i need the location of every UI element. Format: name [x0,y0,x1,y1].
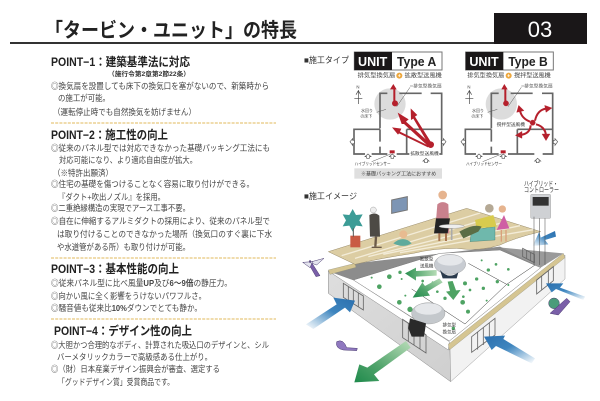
page number badge: 03 [528,17,552,42]
wall vents [343,248,553,353]
subtitle A [358,72,442,80]
subtitle B [467,72,551,80]
floor plan B [461,82,558,168]
controller [531,194,551,265]
panel: type A [350,52,446,179]
body text: point 1: の施工が可能。 [58,93,110,103]
subtitle A: + [398,74,401,80]
heading: installation image: ■施工イメージ [304,191,357,201]
controller label: ハイブリッド・ [524,179,558,188]
floor plan A: 排気型換気扇 [413,82,442,89]
body text: point 2: ◎住宅の基礎を傷つけることなく容易に取り付けができる。 [51,179,254,189]
body text: point 2: は取り付けることのできなかった場所（換気口のすぐ裏に下水 [57,229,272,239]
heading: installation type: ■施工タイプ [304,55,349,65]
fan: diffuser: 送風機 [420,262,434,269]
floor plan A: の床下 [360,113,372,118]
fan: exhaust [408,303,456,337]
floor plan A: 拡散型送風機 [410,150,439,157]
compass A: N [356,84,359,89]
body text: point 4 [51,340,269,387]
body text: point 2: ◎自在に伸縮するアルミダクトの採用により、従来のパネル型で [51,216,270,226]
controller label: コントローラー [524,186,559,194]
body text: point 4: 「グッドデザイン賞」受賞商品です。 [58,377,174,387]
body text: point 2: ◎従来のパネル型では対応できなかった基礎パッキング工法にも [51,143,270,153]
floor plan B: の床下 [471,113,483,118]
compass B: N [467,84,470,89]
subtitle B: + [507,74,510,80]
subtitle B: 排気型換気扇 [467,72,504,80]
subtitle A: 排気型換気扇 [358,72,395,80]
unit label A [354,52,442,70]
fan: diffuser [420,254,466,278]
arrows A [390,84,434,148]
fan: exhaust: 排気型 [443,322,456,329]
building walls [328,247,565,382]
unit label B: Type B [508,54,548,69]
insects [303,258,570,351]
note: ※基礎パッキング工法におすすめ [361,169,436,177]
floor plan B: 撹拌型送風機 [497,121,526,128]
body text: point 4: バーメタリックカラーで高級感ある仕上がり。 [57,352,212,362]
title: 「タービン・ユニット」の特長 [45,19,297,42]
page number badge [494,13,587,44]
floor plan B: 水回り [472,107,484,113]
body text: point 3 [51,278,232,313]
body text: point 2: や水道管がある所）も取り付けが可能。 [57,242,190,252]
floor plan B: ハイブリッドセンサー [466,161,502,168]
body text: point 4: ◎（財）日本産業デザイン振興会が審査、選定する [51,364,220,374]
fan: exhaust: 換気扇 [443,328,456,335]
panel: point 3 [51,261,232,313]
controller label [524,179,559,194]
body text: point 1: （運転停止時でも自然換気を妨げません） [53,107,196,117]
body text: point 1: ◎換気扇を設置しても床下の換気口を塞がないので、新築時から [51,81,269,91]
floor plan B: 排気型換気扇 [524,82,553,89]
unit label A: Type A [397,54,437,69]
body text: point 4: ◎大胆かつ合理的なボディ、計算された吸込口のデザインと、シル [51,340,269,350]
floor plan A: 水回り [361,107,373,113]
vents B [461,139,558,163]
legal reference: （施行令第2章第2節22条） [108,69,190,78]
body text: point 2: （※特許出願済） [53,168,113,178]
title rule [10,42,494,44]
panel: point 4 [51,323,269,387]
panel: type B [461,52,558,168]
vents A [350,139,446,163]
body text: point 2: 対応可能になり、より適応自由度が拡大。 [59,155,197,165]
unit label B: UNIT [469,54,499,69]
body text: point 1 [51,81,269,117]
heading: point 3: POINT−3：基本性能の向上 [51,261,179,276]
heading: point 1: POINT−1：建築基準法に対応 [51,54,190,69]
unit label A: UNIT [358,54,387,69]
unit label B [466,52,553,70]
fan: diffuser: 拡散型 [420,255,434,262]
people on deck [343,191,509,247]
heading: point 2: POINT−2：施工性の向上 [51,127,168,142]
body text: point 3: ◎向かい風に全く影響をうけないパワフルさ。 [51,291,206,301]
floor plan A [350,82,446,168]
body text: point 2: 『ダクト+吹出ノズル』を採用。 [58,192,165,202]
blue airflow arrows [306,231,585,363]
floor plan A: ハイブリッドセンサー [355,161,391,168]
body text: point 3: ◎騒音値も従来比10%ダウンでとても静か。 [51,303,202,313]
body text: point 2 [51,143,272,252]
heading: point 4: POINT−4：デザイン性の向上 [54,323,192,338]
subtitle B: 撹拌型送風機 [514,72,551,80]
fresh-air dots [371,259,510,330]
body text: point 2: ◎二重絶縁構造の実現でアース工事不要。 [51,203,190,213]
wood deck [328,208,541,264]
green airflow arrows [354,268,461,382]
panel: point 2 [51,127,272,252]
illustration: building cutaway [303,191,585,382]
arrows B [501,84,552,141]
body text: point 3: ◎従来パネル型に比べ風量UP及び6〜9倍の静圧力。 [51,278,232,288]
panel: point 1 [51,54,269,117]
subtitle A: 拡散型送風機 [405,72,442,80]
